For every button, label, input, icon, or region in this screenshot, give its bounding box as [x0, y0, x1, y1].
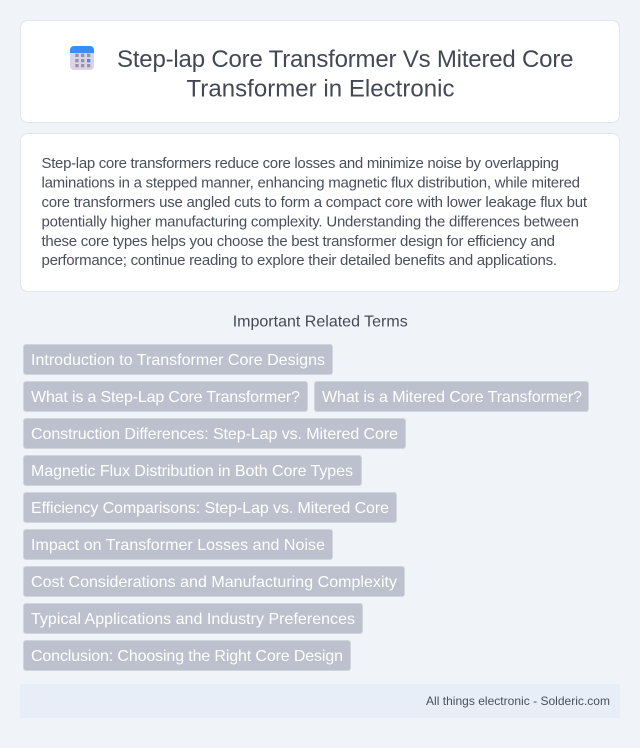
tag list	[23, 344, 589, 671]
paragraph text: performance; continue reading to explore their detailed benefits and applications.	[42, 252, 557, 269]
title: Transformer in Electronic	[186, 76, 454, 102]
tag	[23, 492, 397, 523]
tag: What is a Step-Lap Core Transformer?	[31, 389, 300, 406]
paragraph text: laminations in a stepped manner, enhancing magnetic flux distribution, while mitered	[42, 174, 580, 192]
tag: Construction Differences: Step-Lap vs. Mitered Core	[31, 426, 398, 443]
tag: Impact on Transformer Losses and Noise	[31, 537, 325, 554]
tag: Typical Applications and Industry Preferences	[31, 611, 355, 628]
paragraph text: these core types helps you choose the best transformer design for efficiency and	[42, 233, 555, 250]
tag: Magnetic Flux Distribution in Both Core Types	[31, 463, 353, 480]
icon: calendar	[70, 46, 94, 70]
tag: Cost Considerations and Manufacturing Complexity	[31, 574, 397, 591]
footer text: All things electronic - Solderic.com	[426, 694, 610, 708]
title: Step-lap Core Transformer Vs Mitered Core	[117, 46, 574, 73]
paragraph text: potentially higher manufacturing complexity. Understanding the differences between	[42, 214, 579, 230]
tag	[314, 381, 589, 412]
header card	[20, 20, 620, 123]
tag	[23, 566, 405, 597]
footer bar	[20, 684, 620, 718]
section heading: Important Related Terms	[233, 314, 408, 331]
paragraph text: core transformers use angled cuts to form a compact core with lower leakage flux but	[42, 194, 588, 211]
intro paragraph card	[20, 133, 620, 292]
tag	[23, 603, 363, 634]
tag: Introduction to Transformer Core Designs	[31, 352, 325, 369]
tag	[23, 640, 351, 671]
tag	[23, 418, 406, 449]
tag	[23, 381, 308, 412]
tag	[23, 455, 362, 486]
tag	[23, 529, 333, 560]
paragraph text	[42, 155, 588, 269]
tag: Conclusion: Choosing the Right Core Design	[31, 648, 343, 665]
tag	[23, 344, 333, 375]
tag: Efficiency Comparisons: Step-Lap vs. Mitered Core	[31, 500, 389, 517]
title	[117, 46, 574, 102]
paragraph text: Step-lap core transformers reduce core losses and minimize noise by overlapping	[42, 155, 559, 172]
tag: What is a Mitered Core Transformer?	[322, 389, 582, 406]
